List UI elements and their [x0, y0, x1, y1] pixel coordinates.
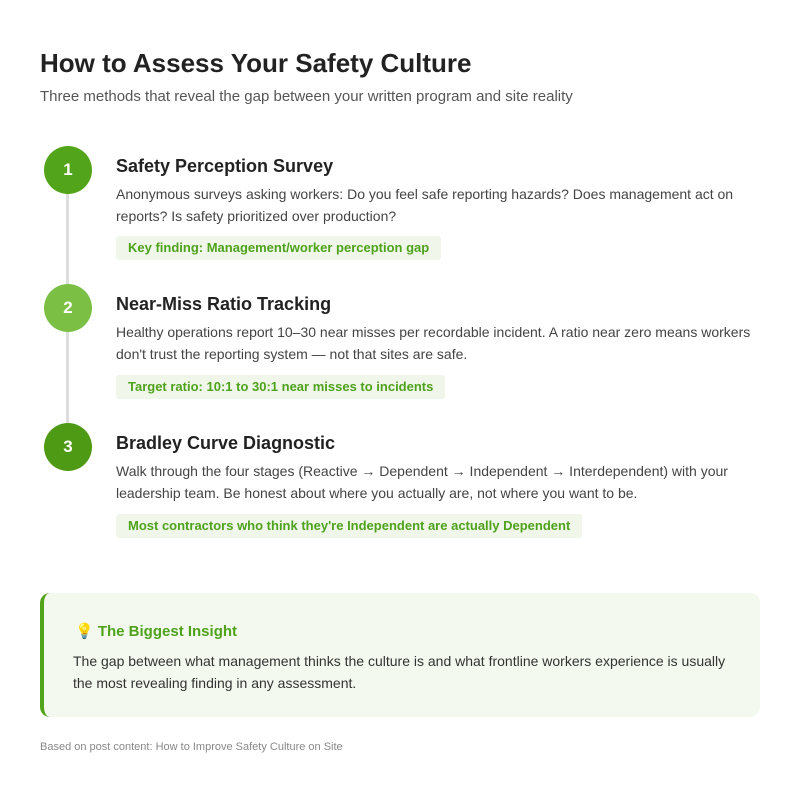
subtitle: Three methods that reveal the gap between your written program and site reality: [40, 88, 573, 105]
insight heading: 💡 The Biggest Insight: [75, 623, 237, 640]
title: How to Assess Your Safety Culture: [40, 48, 472, 78]
circle 3: 3: [63, 437, 73, 456]
insight box: [40, 593, 760, 717]
circle 1: [44, 146, 92, 194]
timeline line: [66, 180, 69, 440]
step 2 tag: [116, 375, 445, 399]
step 3 tag: Most contractors who think they're Independent are actually Dependent: [128, 518, 570, 533]
footer: Based on post content: How to Improve Safety Culture on Site: [40, 741, 343, 753]
insight text: The gap between what management thinks the culture is and what frontline workers experience is usually the most revealing finding in any assessment.: [73, 653, 725, 691]
step 3 tag: [116, 514, 582, 538]
step 3 body: Walk through the four stages (Reactive → Dependent → Independent → Interdependent) with your leadership team. Be honest about where you actually are, not where you want to be.: [116, 463, 728, 501]
circle 1: 1: [63, 160, 73, 179]
step 2 body: Healthy operations report 10–30 near misses per recordable incident. A ratio near zero means workers don't trust the reporting system — not that sites are safe.: [116, 324, 750, 362]
step 2 tag: Target ratio: 10:1 to 30:1 near misses to incidents: [128, 379, 433, 394]
step 2 title: Near-Miss Ratio Tracking: [116, 294, 331, 314]
circle 3: [44, 423, 92, 471]
step 3 title: Bradley Curve Diagnostic: [116, 433, 335, 453]
step 1: [40, 140, 770, 265]
step 1 title: Safety Perception Survey: [116, 156, 333, 176]
circle 2: 2: [63, 298, 73, 317]
step 1 tag: [116, 236, 441, 260]
step 1 tag: Key finding: Management/worker perception gap: [128, 240, 429, 255]
step 1 body: Anonymous surveys asking workers: Do you feel safe reporting hazards? Does management act on reports? Is safety prioritized over production?: [116, 186, 733, 224]
circle 2: [44, 284, 92, 332]
